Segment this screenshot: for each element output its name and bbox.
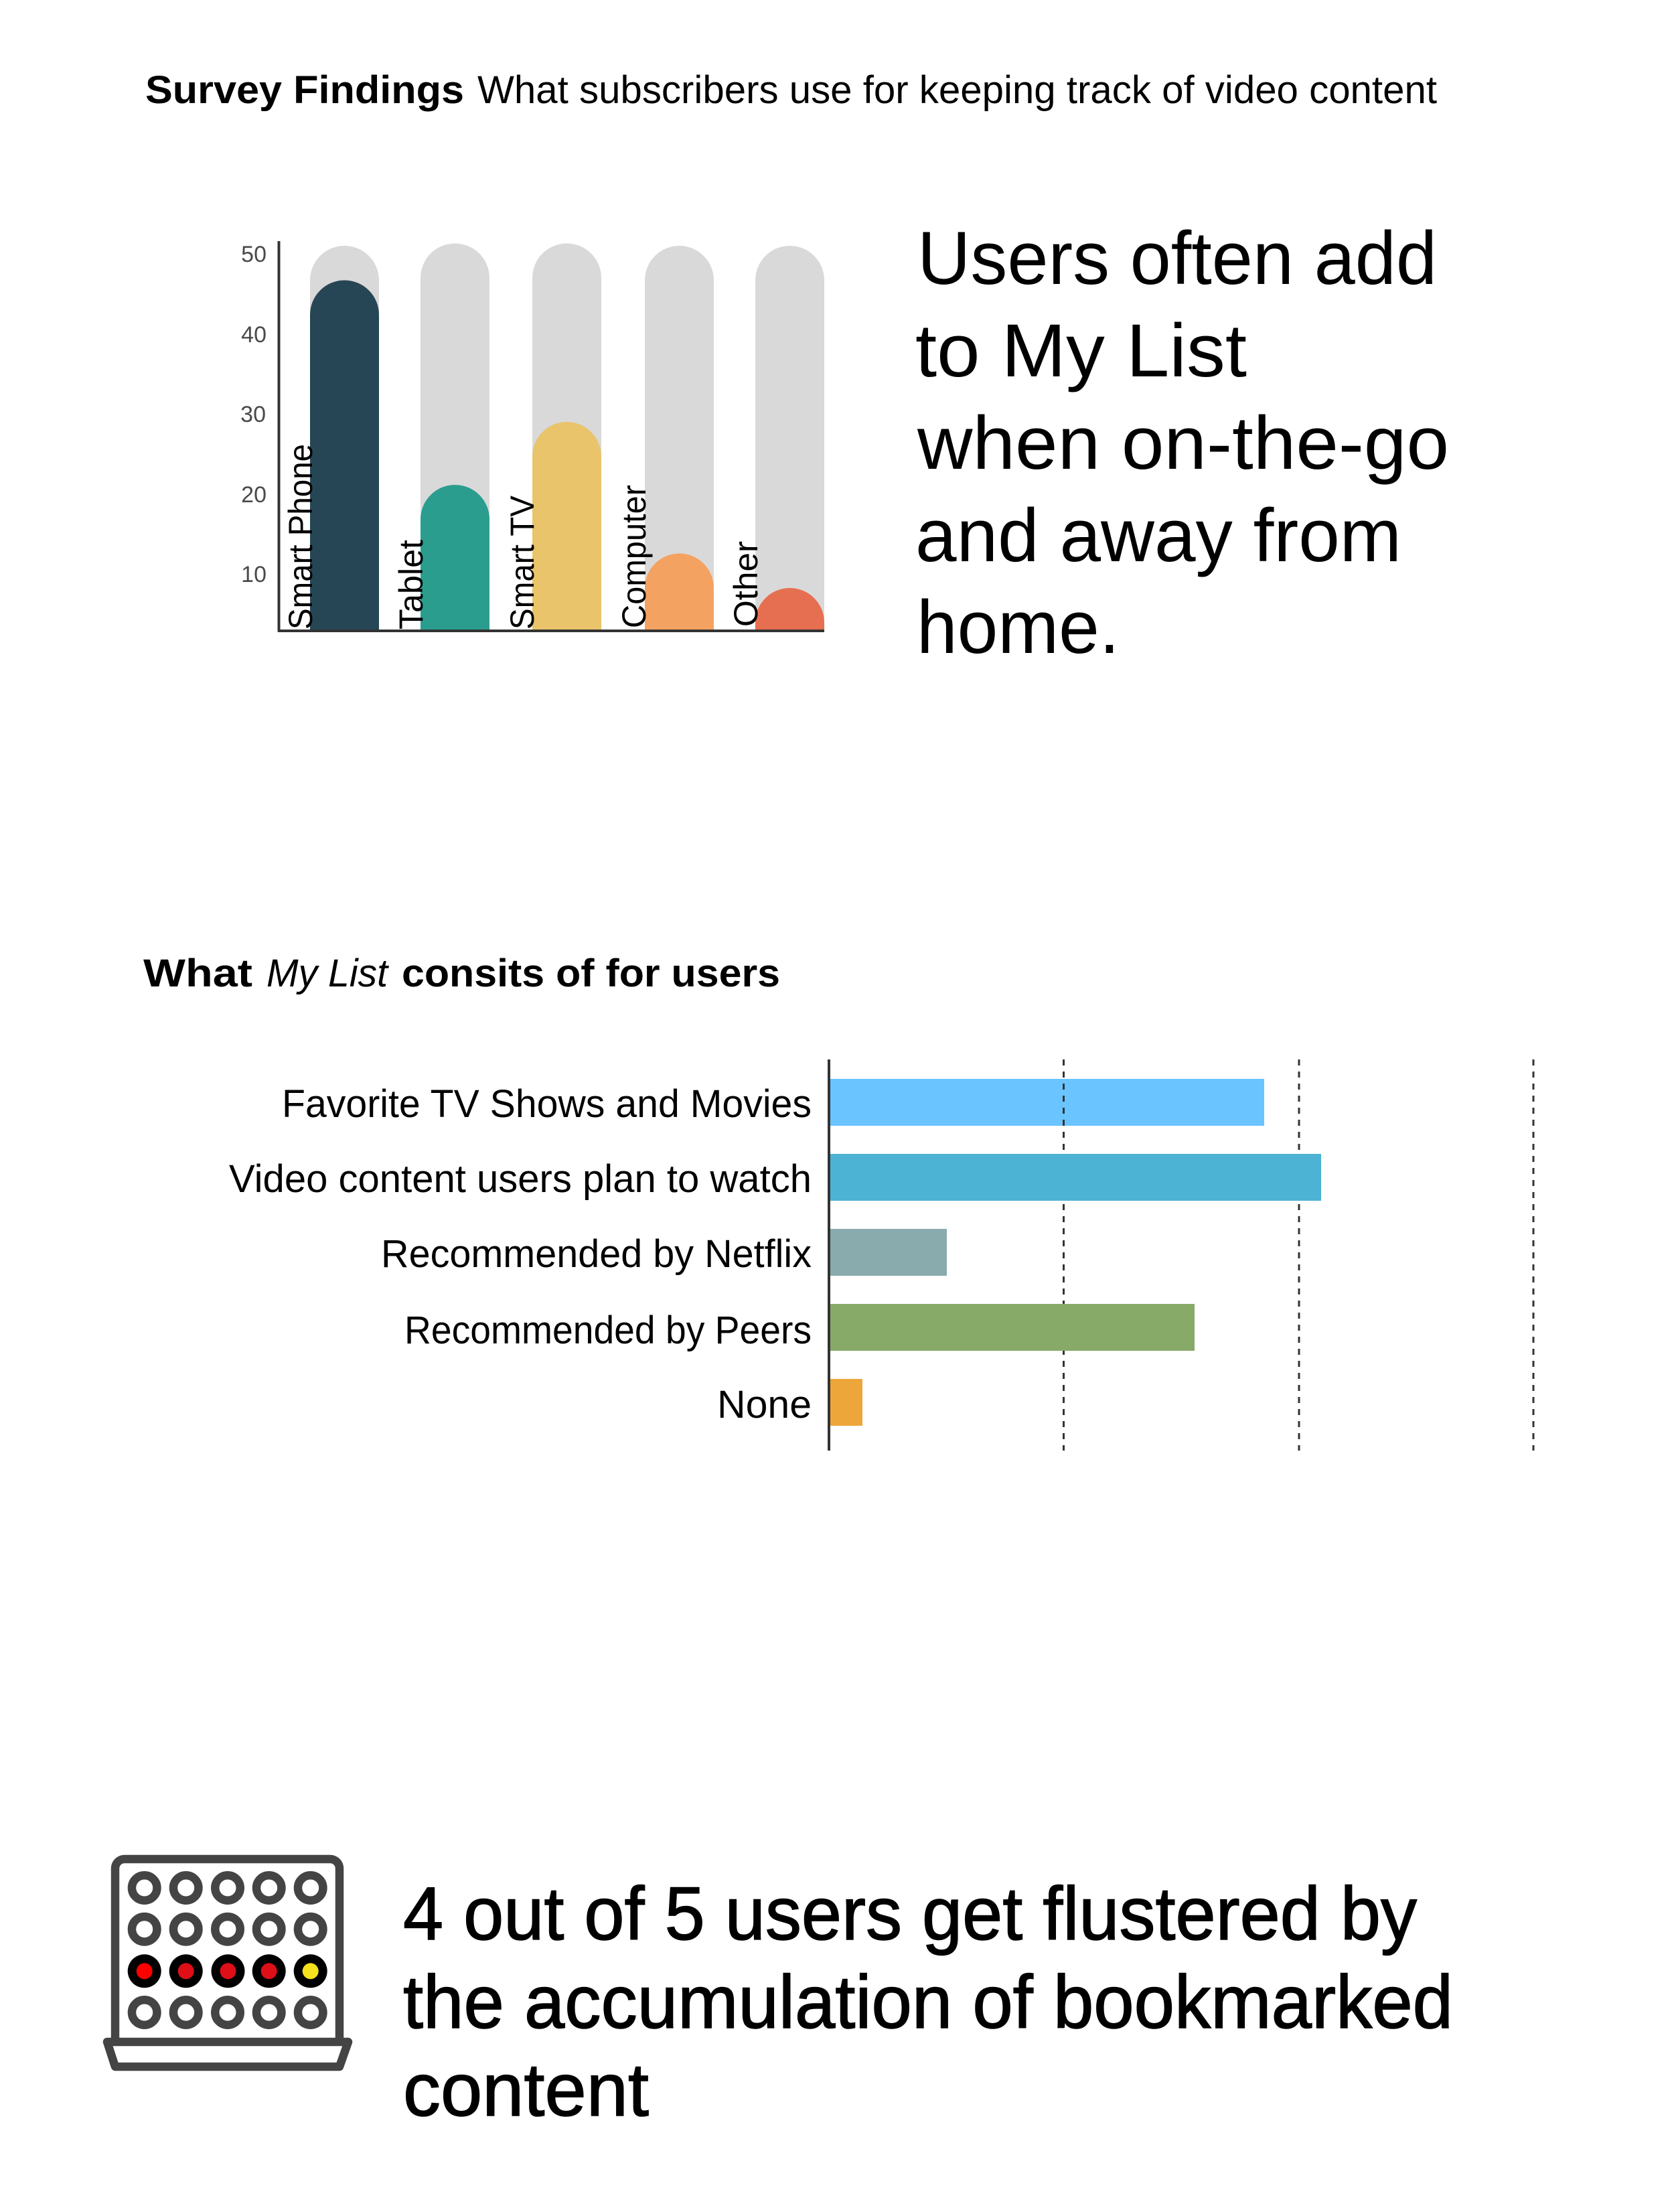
category labels: Recommended by Peers (404, 1309, 812, 1352)
category labels: Favorite TV Shows and Movies (282, 1082, 812, 1126)
callout: users often add to my list: home. (917, 585, 1120, 669)
heading: what my list consists of (143, 952, 780, 995)
category labels (229, 1082, 812, 1426)
callout: 4 out of 5 users get flustered: the accumulation of bookmarked (403, 1960, 1453, 2044)
heading: survey findings: Survey Findings (145, 68, 464, 112)
y axis tick labels (240, 242, 267, 587)
rotated category labels: Other (727, 541, 765, 627)
rotated category labels: Computer (615, 485, 653, 628)
y axis tick labels: 20 (241, 482, 267, 508)
callout: 4 out of 5 users get flustered (403, 1872, 1453, 2132)
rotated category labels: Smart Phone (282, 444, 319, 630)
heading: what my list consists of: What (143, 952, 252, 995)
chart: devices used, rounded column chart (240, 241, 824, 632)
icon: connect four board (107, 1859, 348, 2067)
heading: survey findings: What subscribers use for keeping track of video content (477, 68, 1437, 112)
bar: smart phone (310, 281, 379, 631)
bar: recommended by peers (830, 1304, 1195, 1351)
chart: my list contents, horizontal bar chart (229, 1059, 1533, 1451)
background tracks (310, 244, 824, 631)
category labels: Recommended by Netflix (381, 1232, 812, 1276)
y axis tick labels: 40 (241, 322, 267, 348)
callout: users often add to my list: to My List (915, 309, 1247, 392)
heading: what my list consists of: My List (267, 952, 390, 995)
bar: recommended by netflix (830, 1229, 947, 1276)
category labels: None (717, 1383, 812, 1426)
callout: users often add to my list: Users often add (917, 216, 1437, 300)
bar: other (755, 588, 824, 631)
bar: tablet (421, 485, 489, 631)
y axis tick labels: 30 (240, 402, 266, 427)
y axis tick labels: 10 (241, 562, 267, 587)
category labels: Video content users plan to watch (229, 1157, 812, 1201)
bar: favorite tv shows and movies (830, 1079, 1264, 1126)
bar: video content users plan to watch (830, 1154, 1321, 1201)
heading: what my list consists of: consits of for users (402, 952, 780, 995)
axes (278, 241, 824, 632)
callout: users often add to my list (915, 216, 1449, 669)
bar: none (830, 1379, 862, 1426)
rotated category labels: Tablet (392, 540, 430, 630)
rotated category labels: Smart TV (504, 495, 541, 630)
y axis tick labels: 50 (241, 242, 267, 267)
bar: computer (645, 553, 714, 631)
callout: 4 out of 5 users get flustered: content (403, 2048, 649, 2132)
callout: users often add to my list: and away from (915, 494, 1401, 577)
bar: smart tv (532, 422, 601, 631)
rotated category labels (282, 444, 765, 630)
callout: users often add to my list: when on-the-go (917, 401, 1449, 485)
callout: 4 out of 5 users get flustered: 4 out of 5 users get flustered by (403, 1872, 1417, 1956)
